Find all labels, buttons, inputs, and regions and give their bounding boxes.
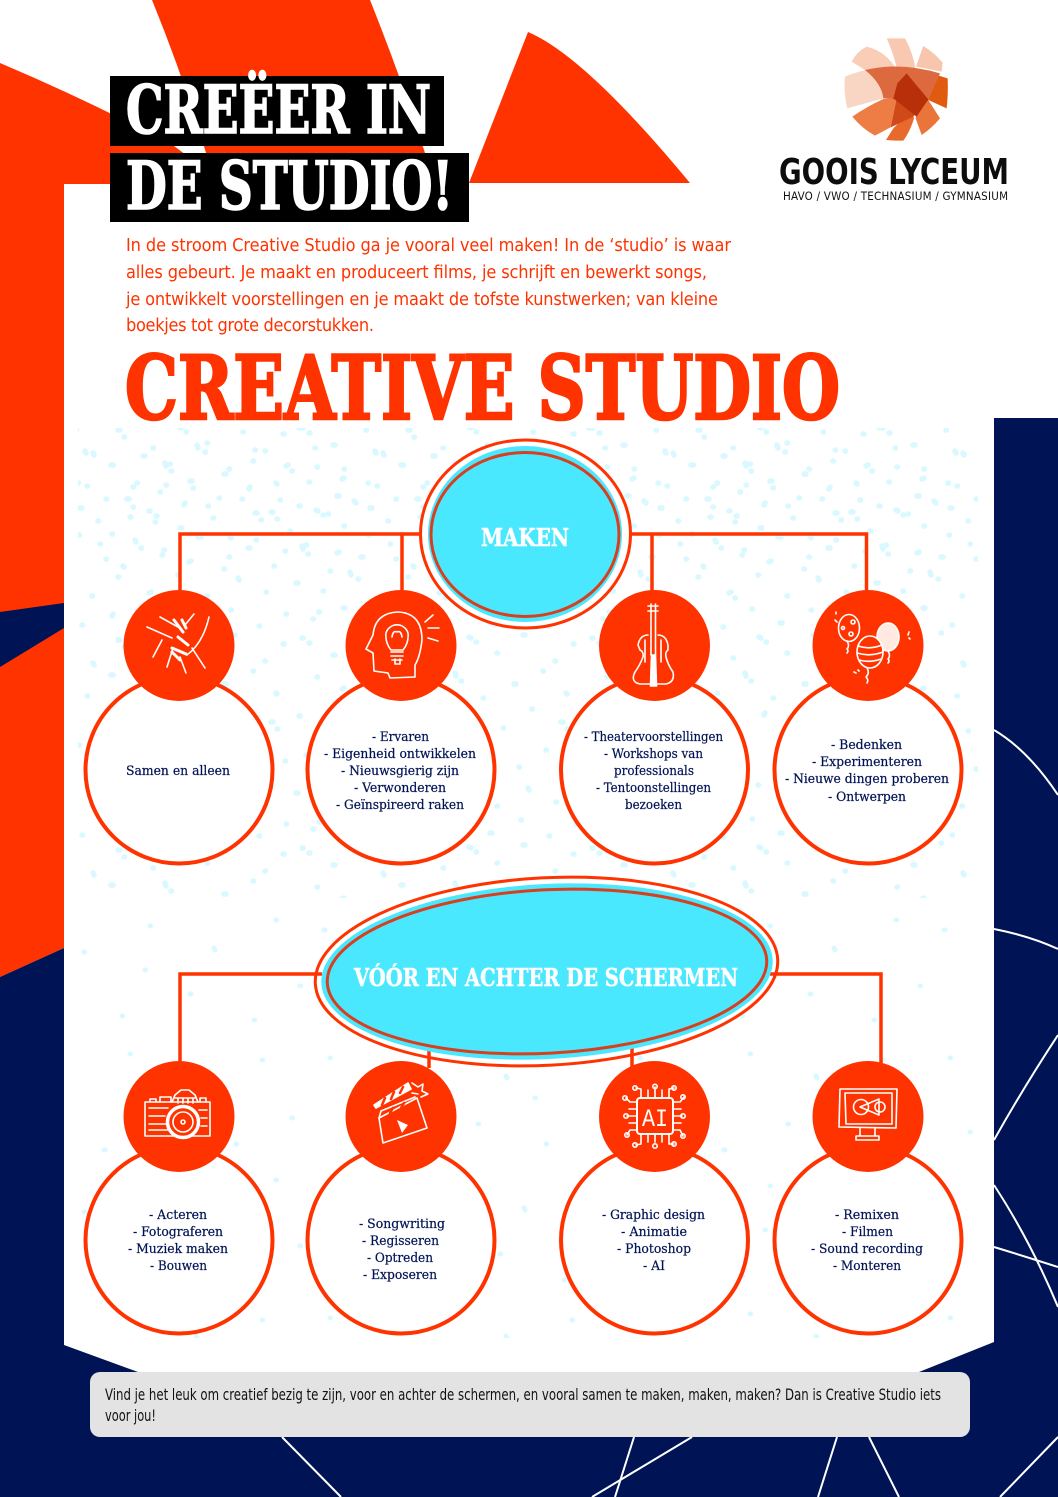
background: white network lines: [282, 730, 1058, 1497]
card: Songwriting: - Exposeren: [363, 1268, 437, 1283]
card: Bedenken: - Experimenteren: [812, 755, 922, 770]
background: navy shapes: [0, 418, 1058, 1497]
card: Graphic design: [561, 1061, 748, 1334]
card: Bedenken: - Ontwerpen: [828, 790, 906, 805]
card: Graphic design: - Graphic design: [602, 1208, 705, 1223]
title: [110, 71, 469, 225]
card: Graphic design: - AI: [643, 1259, 665, 1274]
card: Songwriting: - Optreden: [367, 1251, 433, 1266]
card: Remixen: [774, 1061, 962, 1334]
card: Theatervoorstellingen: professionals: [614, 764, 694, 779]
icon: joined hands: [147, 614, 209, 673]
chip label: AI: [642, 1105, 668, 1134]
intro paragraph: [125, 235, 731, 336]
cyan fill: [428, 446, 622, 622]
node: Vóór en achter de schermen: [180, 866, 881, 1077]
card: Theatervoorstellingen: [561, 590, 748, 864]
card: Acteren: [86, 1061, 272, 1334]
card: Samen en alleen: Samen en alleen: [126, 764, 230, 779]
card: Ervaren: - Nieuwsgierig zijn: [341, 764, 459, 779]
node: Maken: [180, 440, 866, 628]
card: Songwriting: - Songwriting: [359, 1217, 446, 1232]
logo mark: [845, 38, 948, 141]
card: Acteren: - Acteren: [149, 1208, 207, 1223]
inner ring: [323, 878, 771, 1065]
icon: head with lightbulb: [366, 612, 439, 678]
card: Acteren: - Muziek maken: [128, 1242, 228, 1257]
card: Graphic design: - Animatie: [621, 1225, 687, 1240]
card: Ervaren: - Geïnspireerd raken: [336, 798, 464, 813]
card: Remixen: - Sound recording: [811, 1242, 924, 1257]
inner ring: [431, 452, 619, 616]
white page panel: [64, 184, 994, 1400]
card: Ervaren: - Eigenheid ontwikkelen: [324, 747, 476, 762]
label: VÓÓR EN ACHTER DE SCHERMEN: [353, 963, 738, 992]
intro paragraph: je ontwikkelt voorstellingen en je maakt de tofste kunstwerken; van kleine: [125, 289, 718, 310]
background: red shapes: [0, 0, 690, 977]
card: Remixen: - Filmen: [842, 1225, 893, 1240]
card: Acteren: - Bouwen: [150, 1259, 207, 1274]
callout: closing message: [90, 1372, 970, 1437]
card: Songwriting: - Regisseren: [362, 1234, 439, 1249]
card: Ervaren: - Verwonderen: [354, 781, 446, 796]
connector lines: [180, 534, 866, 592]
icon: cello: [633, 604, 673, 686]
card: Remixen: - Monteren: [833, 1259, 901, 1274]
icon: camera: [145, 1090, 210, 1138]
label: MAKEN: [481, 523, 569, 552]
heading: Creative Studio: CREATIVE STUDIO: [125, 336, 840, 440]
intro paragraph: boekjes tot grote decorstukken.: [126, 315, 374, 336]
card: Ervaren: - Ervaren: [372, 730, 429, 745]
card: Songwriting: [308, 1061, 494, 1334]
card: Ervaren: [308, 590, 494, 864]
icon: monitor: [839, 1089, 897, 1140]
logo tagline: HAVO / VWO / TECHNASIUM / GYMNASIUM: [783, 189, 1008, 203]
title line 1: CREËER IN: [126, 71, 431, 149]
cyan fill: [317, 872, 777, 1071]
logo: Gooois Lyceum: [779, 38, 1009, 203]
connector lines: [180, 974, 881, 1068]
intro paragraph: In de stroom Creative Studio ga je vooral veel maken! In de ‘studio’ is waar: [126, 235, 731, 256]
card: Graphic design: - Photoshop: [617, 1242, 691, 1257]
intro paragraph: alles gebeurt. Je maakt en produceert films, je schrijft en bewerkt songs,: [126, 262, 707, 283]
icon: balloons: [835, 612, 910, 683]
card: Samen en alleen: [86, 590, 272, 864]
card: Theatervoorstellingen: - Tentoonstellingen: [596, 781, 711, 796]
card: Acteren: - Fotograferen: [133, 1225, 223, 1240]
card: Theatervoorstellingen: bezoeken: [625, 798, 682, 813]
icon: AI chip: [623, 1084, 685, 1148]
outer ring: [310, 866, 783, 1077]
callout: closing message: voor jou!: [105, 1406, 156, 1425]
logo name: GOOIS LYCEUM: [779, 152, 1009, 193]
icon: clapperboard: [374, 1083, 428, 1143]
title line 2: DE STUDIO!: [126, 147, 453, 225]
card: Bedenken: - Bedenken: [831, 738, 902, 753]
card: Bedenken: [774, 590, 962, 864]
speckle texture: [78, 428, 978, 1338]
card: Theatervoorstellingen: - Theatervoorstellingen: [584, 730, 723, 745]
card: Remixen: - Remixen: [835, 1208, 899, 1223]
card: Theatervoorstellingen: - Workshops van: [604, 747, 703, 762]
outer ring: [420, 440, 630, 628]
card: Bedenken: - Nieuwe dingen proberen: [785, 772, 949, 787]
